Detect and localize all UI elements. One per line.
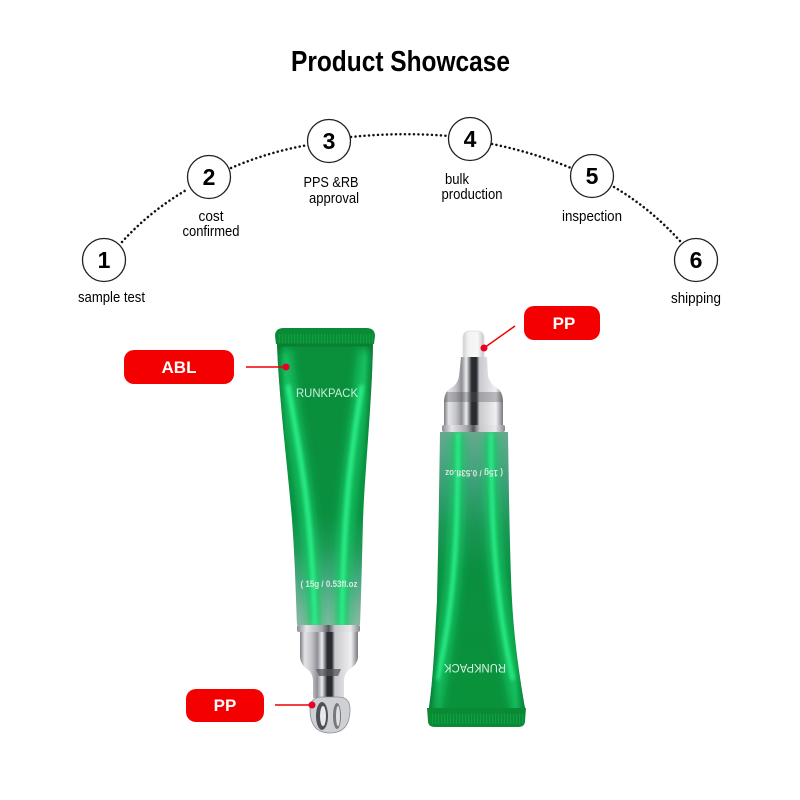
tube crimp — [427, 708, 526, 727]
step 4: bulk — [445, 171, 469, 188]
right tube product — [425, 331, 530, 727]
step 3: approval — [309, 190, 359, 207]
callout: PP top: PP — [553, 314, 575, 333]
brand text: RUNKPACK — [296, 388, 358, 400]
step 4 — [442, 118, 502, 203]
callout: ABL: ABL — [162, 358, 196, 377]
dotted arc connectors — [122, 134, 680, 242]
step 4: production — [442, 186, 502, 203]
step 2: 2 — [203, 164, 215, 190]
step 3: 3 — [323, 128, 335, 154]
silver cap — [444, 357, 503, 426]
left tube product — [270, 328, 380, 733]
capacity text: ( 15g / 0.53fl.oz — [300, 579, 358, 590]
step 5: inspection — [562, 208, 622, 225]
step 1: 1 — [98, 247, 111, 273]
tube body — [277, 344, 373, 625]
step 1 — [78, 238, 146, 306]
step 4: 4 — [464, 126, 477, 152]
step 2: confirmed — [182, 223, 240, 240]
brand text rotated: RUNKPACK — [444, 661, 506, 673]
tube crimp — [275, 328, 375, 344]
capacity text rotated: ( 15g / 0.53fl.oz — [445, 467, 503, 478]
callout: PP bottom: PP — [214, 696, 236, 715]
callout: PP bottom — [186, 689, 316, 722]
tube body — [429, 432, 525, 708]
transparent nozzle — [463, 331, 484, 358]
step 6: shipping — [671, 290, 721, 307]
step 6: 6 — [690, 247, 702, 273]
step 6 — [671, 238, 721, 307]
step 1: sample test — [78, 289, 146, 306]
silver applicator — [297, 625, 360, 632]
step 5 — [562, 154, 622, 225]
step 3 — [304, 120, 359, 207]
callout: ABL — [124, 350, 290, 384]
step 5: 5 — [586, 163, 599, 189]
step 2: cost — [198, 208, 224, 225]
step 2 — [182, 156, 240, 240]
title: Product Showcase — [291, 46, 510, 78]
callout: PP top — [480, 306, 600, 352]
process timeline — [78, 118, 721, 307]
step 3: PPS &RB — [304, 174, 358, 191]
